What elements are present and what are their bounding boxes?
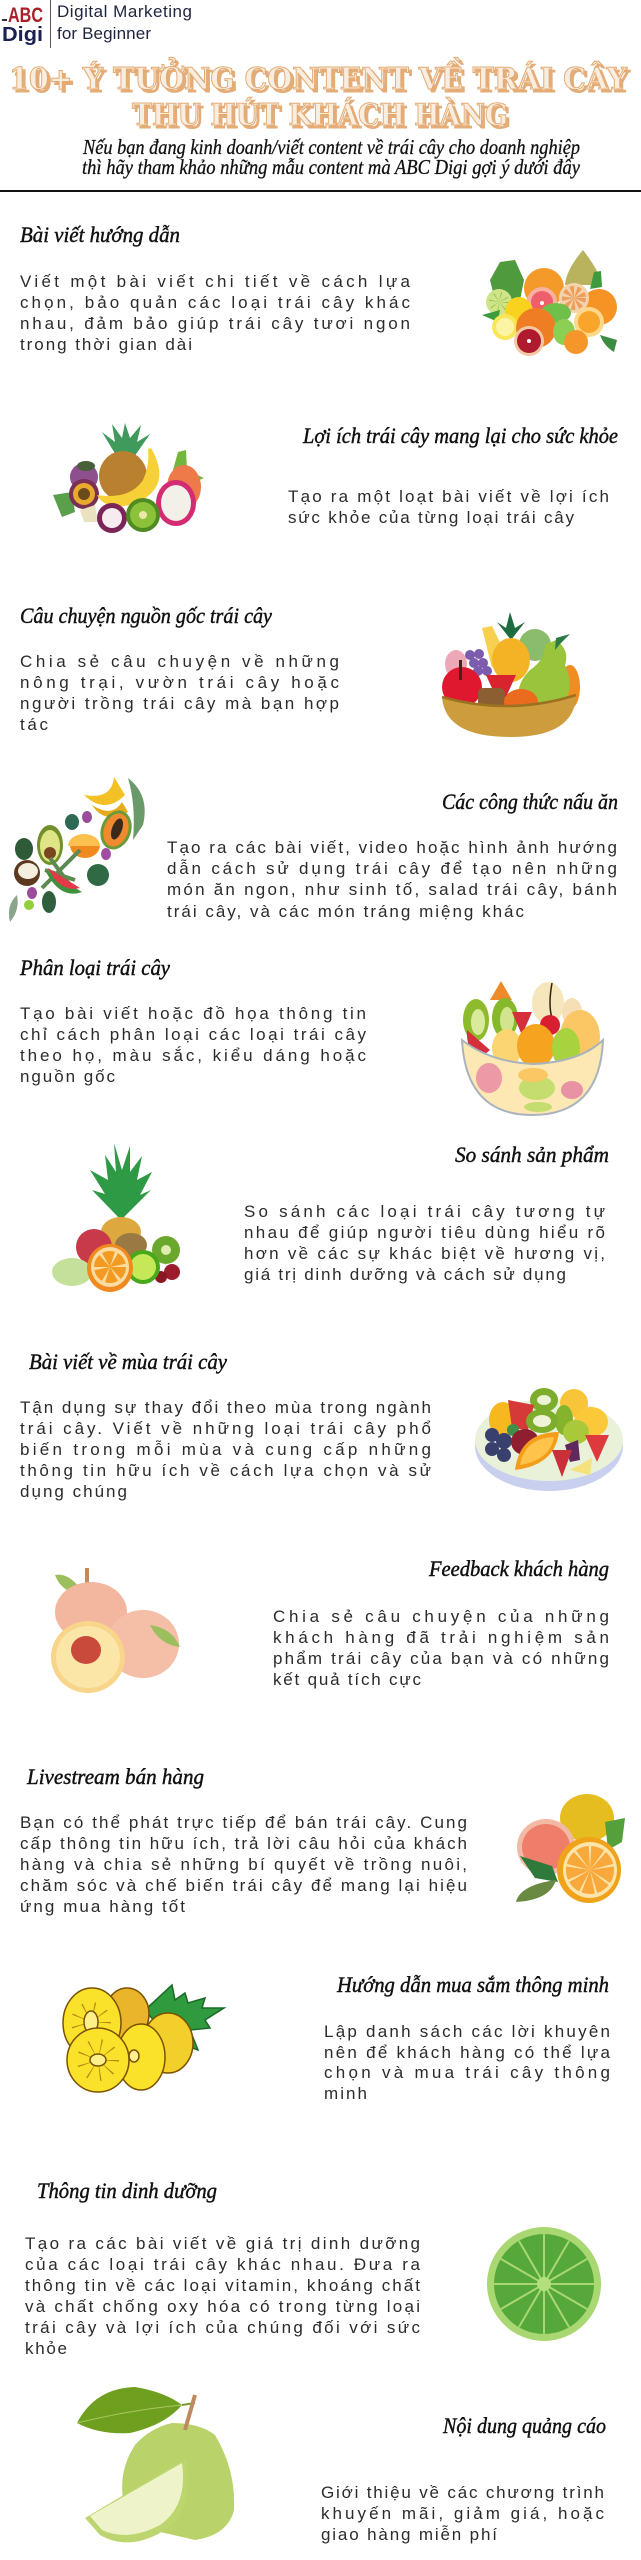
- title: THU HÚT KHÁCH HÀNG: [132, 97, 508, 133]
- heading: Bài viết hướng dẫn: [20, 222, 180, 247]
- body text: dẫn cách sử dụng trái cây để tạo nên những: [167, 859, 617, 878]
- body text: dụng chúng: [20, 1482, 127, 1501]
- body text: chọn và mua trái cây thông: [324, 2063, 610, 2082]
- body text: Lập danh sách các lời khuyên: [324, 2022, 610, 2041]
- body text: [321, 2483, 604, 2544]
- body text: Chia sẻ câu chuyện về những: [20, 652, 339, 671]
- heading: Phân loại trái cây: [19, 955, 170, 980]
- body text: thông tin hữu ích về cách lựa chọn và sử: [20, 1461, 431, 1480]
- icon: pineapple with fruits: [52, 1143, 180, 1292]
- body text: [20, 652, 340, 734]
- body text: người trồng trái cây mà bạn hợp: [20, 694, 339, 713]
- panel: So sánh sản phẩm: [52, 1142, 609, 1292]
- body text: của các loại trái cây khác nhau. Đưa ra: [25, 2255, 421, 2274]
- panel: Lợi ích trái cây mang lại cho sức khỏe: [53, 423, 618, 533]
- panel: Câu chuyện nguồn gốc trái cây: [20, 603, 580, 737]
- panel: Nội dung quảng cáo: [77, 2387, 606, 2544]
- body text: trong thời gian dài: [20, 335, 192, 354]
- body text: Tận dụng sự thay đổi theo mùa trong ngành: [20, 1398, 431, 1417]
- icon: fruit salad bowl: [462, 981, 603, 1115]
- body text: hơn về các sự khác biệt về hương vị,: [244, 1244, 605, 1263]
- body text: Tạo ra một loạt bài viết về lợi ích: [288, 487, 609, 506]
- body text: thông tin về các loại vitamin, khoáng chất: [25, 2276, 420, 2295]
- body text: Tạo ra các bài viết về giá trị dinh dưỡng: [25, 2234, 420, 2253]
- body text: theo họ, màu sắc, kiểu dáng hoặc: [20, 1046, 367, 1065]
- subtitle: thì hãy tham khảo những mẫu content mà ABC Digi gợi ý dưới đây: [82, 155, 581, 179]
- heading: Nội dung quảng cáo: [442, 2413, 606, 2438]
- body text: Giới thiệu về các chương trình: [321, 2483, 604, 2502]
- logo: ABC Digi: Digi: [2, 24, 43, 46]
- body text: [288, 487, 609, 527]
- logo: ABC Digi: [2, 0, 192, 48]
- heading: Thông tin dinh dưỡng: [37, 2178, 217, 2203]
- body text: và chất chống oxy hóa có trong từng loại: [25, 2297, 420, 2316]
- body text: biến trong mỗi mùa và cung cấp những: [20, 1440, 431, 1459]
- panel: Bài viết về mùa trái cây: [20, 1349, 623, 1501]
- body text: [20, 272, 411, 354]
- panel: Thông tin dinh dưỡng: [25, 2178, 601, 2358]
- body text: [273, 1607, 609, 1689]
- icon: citrus pile: [482, 250, 617, 356]
- heading: So sánh sản phẩm: [455, 1142, 609, 1167]
- heading: Livestream bán hàng: [26, 1764, 204, 1789]
- body text: minh: [324, 2084, 367, 2103]
- heading: Bài viết về mùa trái cây: [29, 1349, 227, 1374]
- body text: chọn, bảo quản các loại trái cây khác: [20, 293, 410, 312]
- body text: kết quả tích cực: [273, 1670, 422, 1689]
- subtitle: Nếu bạn đang kinh doanh/viết content về trái cây cho doanh nghiệp: [82, 135, 580, 159]
- title: [9, 57, 628, 133]
- body text: ứng mua hàng tốt: [20, 1897, 185, 1916]
- panel: Phân loại trái cây: [19, 955, 603, 1115]
- body text: Bạn có thể phát trực tiếp để bán trái cây. Cung: [20, 1813, 467, 1832]
- body text: [20, 1398, 431, 1501]
- panel: Hướng dẫn mua sắm thông minh: [63, 1972, 611, 2103]
- body text: chăm sóc và chế biến trái cây để mang lại hiệu: [20, 1876, 467, 1895]
- icon: tropical fruit group: [53, 423, 204, 533]
- heading: Câu chuyện nguồn gốc trái cây: [20, 603, 272, 628]
- body text: sức khỏe của từng loại trái cây: [288, 508, 574, 527]
- body text: khuyến mãi, giảm giá, hoặc: [321, 2504, 604, 2523]
- body text: chỉ cách phân loại các loại trái cây: [20, 1025, 366, 1044]
- logo: ABC Digi: ABC: [8, 4, 43, 27]
- body text: nguồn gốc: [20, 1067, 116, 1086]
- title: 10+ Ý TƯỞNG CONTENT VỀ TRÁI CÂY: [9, 57, 628, 97]
- body text: trái cây và lợi ích của chúng đối với sức: [25, 2318, 421, 2337]
- body text: nên để khách hàng có thể lựa: [324, 2043, 611, 2062]
- body text: tác: [20, 715, 48, 734]
- body text: món ăn ngon, như sinh tố, salad trái cây, bánh: [167, 880, 617, 899]
- body text: [25, 2234, 421, 2358]
- body text: hàng và chia sẻ những bí quyết về trồng nuôi,: [20, 1855, 467, 1874]
- body text: khỏe: [25, 2339, 67, 2358]
- body text: khách hàng đã trải nghiệm sản: [273, 1628, 609, 1647]
- heading: Feedback khách hàng: [428, 1556, 609, 1581]
- panel: Bài viết hướng dẫn: [20, 222, 617, 356]
- body text: [20, 1813, 467, 1916]
- body text: Tạo bài viết hoặc đồ họa thông tin: [20, 1004, 366, 1023]
- heading: Các công thức nấu ăn: [442, 789, 618, 814]
- logo: ABC Digi: Digital Marketing: [57, 2, 192, 21]
- icon: lime slice: [487, 2227, 601, 2341]
- body text: giao hàng miễn phí: [321, 2525, 497, 2544]
- body text: nhau để giúp người tiêu dùng hiểu rõ: [244, 1223, 605, 1242]
- subtitle: [82, 135, 581, 179]
- body text: [324, 2022, 611, 2103]
- icon: peaches: [51, 1568, 180, 1693]
- body text: cấp thông tin hữu ích, trả lời câu hỏi của khách: [20, 1834, 467, 1853]
- panel: Feedback khách hàng: [51, 1556, 609, 1693]
- body text: [244, 1202, 605, 1284]
- body text: [167, 838, 617, 921]
- icon: fruit plate: [475, 1388, 623, 1491]
- icon: guava: [77, 2387, 234, 2542]
- icon: fruit basket: [442, 612, 580, 737]
- body text: phẩm trái cây của bạn và có những: [273, 1649, 609, 1668]
- icon: pineapple slices: [63, 1985, 224, 2092]
- body text: Viết một bài viết chi tiết về cách lựa: [20, 272, 411, 291]
- body text: trái cây, và các món tráng miệng khác: [167, 902, 524, 921]
- body text: Chia sẻ câu chuyện của những: [273, 1607, 609, 1626]
- icon: lemon and citrus slices: [516, 1794, 625, 1903]
- body text: nhau, đảm bảo giúp trái cây tươi ngon: [20, 314, 410, 333]
- body text: nông trại, vườn trái cây hoặc: [20, 673, 340, 692]
- heading: Lợi ích trái cây mang lại cho sức khỏe: [302, 423, 618, 448]
- panel: Livestream bán hàng: [20, 1764, 625, 1916]
- logo: ABC Digi: for Beginner: [57, 24, 151, 43]
- body text: [20, 1004, 367, 1086]
- body text: Tạo ra các bài viết, video hoặc hình ảnh hướng: [167, 838, 617, 857]
- panel: Các công thức nấu ăn: [9, 777, 618, 922]
- body text: giá trị dinh dưỡng và cách sử dụng: [244, 1265, 566, 1284]
- body text: trái cây. Viết về những loại trái cây phổ: [20, 1419, 431, 1438]
- body text: So sánh các loại trái cây tương tự: [244, 1202, 605, 1221]
- heading: Hướng dẫn mua sắm thông minh: [336, 1972, 609, 1997]
- icon: scattered tropical fruits: [9, 777, 145, 922]
